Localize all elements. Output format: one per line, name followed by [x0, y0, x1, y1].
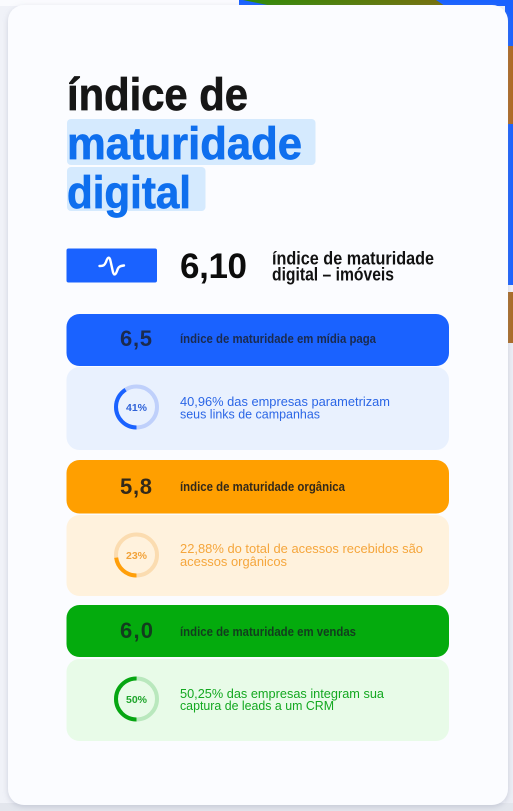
header bar: índice de maturidade em mídia paga — [180, 332, 377, 346]
donut 23% — [116, 534, 157, 576]
detail card — [66, 515, 449, 596]
header bar: 6,5 — [120, 326, 152, 351]
donut 41%: 41% — [126, 402, 148, 414]
detail text: 22,88% do total de acessos recebidos são — [180, 541, 423, 556]
title: maturidade — [67, 118, 302, 169]
header bar — [66, 460, 449, 514]
detail text — [180, 541, 423, 569]
panel: orgânica — [66, 460, 449, 596]
detail text: acessos orgânicos — [180, 554, 287, 569]
overall score label — [272, 248, 434, 284]
detail text: 50,25% das empresas integram sua — [180, 686, 385, 701]
donut 23%: 23% — [126, 550, 148, 562]
title: digital — [67, 167, 191, 218]
header bar — [66, 605, 449, 657]
icon: pulse line — [66, 248, 157, 282]
overall score label: digital – imóveis — [272, 264, 394, 284]
title — [67, 69, 316, 218]
header bar — [66, 314, 449, 366]
detail text — [180, 394, 390, 422]
donut 50%: 50% — [126, 694, 148, 706]
overall score value: 6,10 — [180, 247, 247, 286]
overall score label: índice de maturidade — [272, 248, 434, 268]
detail card — [66, 659, 449, 741]
header bar: 5,8 — [120, 474, 152, 499]
detail text: 40,96% das empresas parametrizam — [180, 394, 390, 409]
detail text — [180, 686, 385, 713]
overall score row — [66, 247, 434, 286]
header bar: 6,0 — [120, 618, 153, 643]
donut 41% — [116, 386, 157, 428]
title: índice de — [67, 69, 248, 120]
header bar: índice de maturidade em vendas — [180, 625, 356, 639]
detail text: seus links de campanhas — [180, 406, 320, 422]
donut 50% — [116, 678, 157, 720]
panel: mídia paga — [66, 314, 449, 450]
header bar: índice de maturidade orgânica — [180, 480, 346, 494]
detail text: captura de leads a um CRM — [180, 698, 334, 713]
detail card — [66, 367, 449, 450]
panel: vendas — [66, 605, 449, 741]
